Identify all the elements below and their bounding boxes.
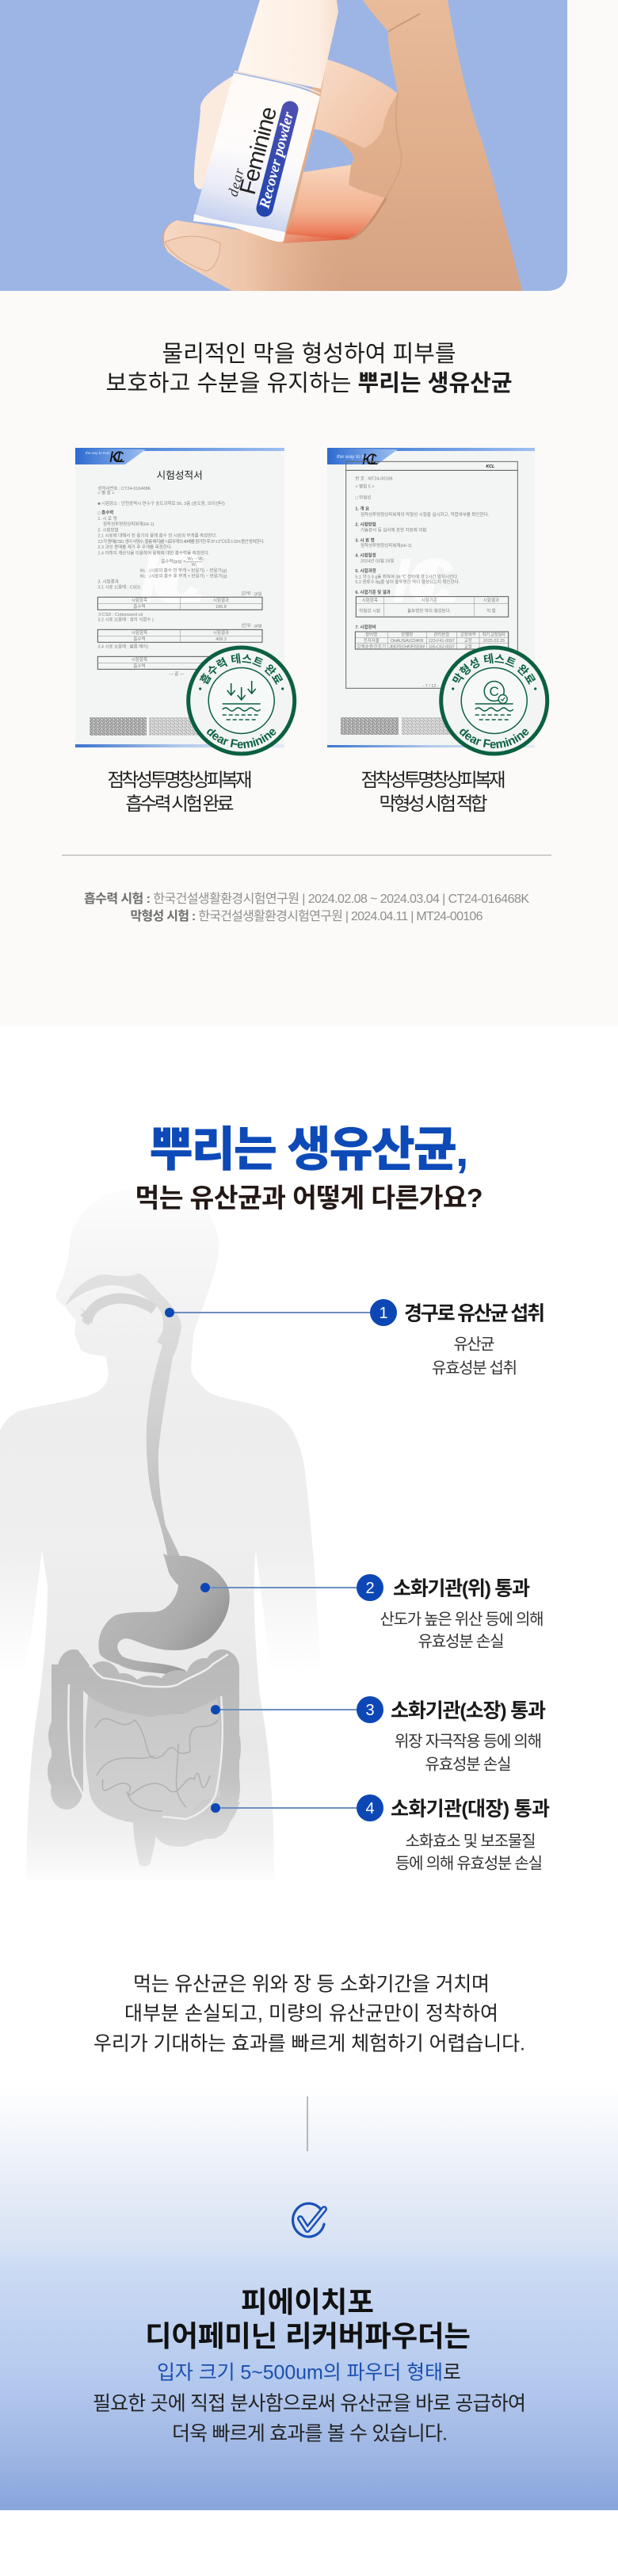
document text: 3.2 시료 2(용매 : 생리 식염수 ) [97,617,154,623]
document text: ■ 시험장소 : 인천광역시 연수구 송도과학로 56, 3층 (송도동, 브이센터) [97,500,225,506]
document text: < 별첨 5 > [355,483,374,489]
explanation text: 우리가 기대하는 효과를 빠르게 체험하기 어렵습니다. [93,2032,525,2054]
heading: physical film [106,341,512,396]
step 2: stomach passage: 소화기관(위) 통과 [393,1577,530,1599]
panel: cream background [0,0,618,1026]
panel: film forming test certificate: KCL [392,545,460,616]
step 4: large intestine passage: 소화효소 및 보조물질 [406,1833,536,1851]
document text: 5.2 증류수 8g을 넣어 불투명한 막이 형성되는지 확인한다. [355,579,460,585]
badge: film forming test complete: dear Feminine [460,729,529,748]
panel: film forming test certificate [327,448,535,748]
step 1: oral intake [165,1299,545,1378]
document text: W₂ : (시료의 흡수 후 무게 + 반응기) − 반응기(g) [140,573,227,579]
badge: film forming test complete: 막형성 테스트 완료 [452,653,536,685]
test reference notes: 흡수력 시험 : 한국건설생활환경시험연구원 | 2024.02.08 ~ 2024.03.04 | CT24-016468K [84,892,529,906]
step 1: oral intake: 유산균 [453,1336,494,1354]
step 3: small intestine passage: 유효성분 손실 [425,1756,512,1774]
document text: W₂ − W₁ [188,557,204,562]
document text: 시험성적서 [157,470,203,481]
caption: film forming test [361,770,505,814]
document text: 186.8 [216,605,227,610]
document text: W₁ : (시료의 흡수 전 무게 + 반응기) − 반응기(g) [140,567,227,573]
document text: — 끝 — [169,671,185,677]
closing heading [145,2286,471,2352]
heading: physical film: 보호하고 수분을 유지하는 뿌리는 생유산균 [106,370,512,396]
bottle brand labels: Recover powder [256,109,297,211]
panel: absorption test certificate: KCL [109,449,125,466]
badge: absorption test complete [186,645,296,756]
stomach [98,1554,230,1676]
closing text: 더욱 빠르게 효과를 볼 수 있습니다. [172,2422,448,2444]
document text: 2.2 각 용매(CSD, 생리 식염수, 볼륨 배지)를 시료무게의 40배를 첨가한 후 37 ± 2℃/1조 ± 23 h 동안 방치한다. [97,538,265,545]
bottle [193,0,338,242]
panel: film forming test certificate: KCL [362,452,379,468]
badge: film forming test complete: C [490,684,499,699]
document text: □ 흡수력 [97,510,113,516]
document text: 장비명 [365,632,377,638]
document text: 흡수력 [133,603,146,610]
document text: 시험항목 [132,629,147,636]
panel: product photo [0,0,567,291]
document text: 전자저울 [364,637,380,644]
step 3: small intestine passage: 3 [365,1702,375,1719]
document text: 교정여부 [460,632,476,638]
document text: [단위 : g/g] [242,590,262,596]
document text: 흡수력(g/g) = [161,558,185,564]
document text: 7. 시험장비 [355,624,376,630]
step 4: large intestine passage [211,1794,550,1873]
panel: absorption test certificate: KCL [139,539,206,618]
heading: physical film: 물리적인 막을 형성하여 피부를 [162,341,456,367]
document text: 적 합 [486,607,496,613]
document text: 3.4 시료 3(용매 : 볼륨 배지) [97,644,148,650]
document text: 2024년 03월 26일 [360,558,395,564]
document text: 2025.03.25 [483,639,505,644]
panel: absorption test certificate [75,448,284,748]
body diagram [0,1187,321,1880]
panel: blue gradient background [0,2077,618,2510]
panel: film forming test certificate: the way to trust [337,454,372,460]
document text: 교정 [464,638,472,644]
document text: 시험결과 [213,629,229,636]
document text: OHAUS/AX224KR [391,639,424,644]
heading: sprayed vs oral probiotics: 먹는 유산균과 어떻게 다른가요? [135,1184,483,1213]
oral cavity and esophagus [65,1273,181,1557]
document text: 점착성투명창상피복재(HI-1) [360,542,412,548]
document text: 시험항목 [132,656,147,663]
step 1: oral intake: 유효성분 섭취 [432,1359,517,1378]
icon: check mark [293,2203,324,2237]
document text: 5.1 약 0.3 g을 취하여 38 ℃ 정비에 약 2시간 방치시킨다. [355,573,459,579]
document text: ※CSD : Cottonseed oil [97,612,143,617]
step 2: stomach passage: 2 [365,1580,375,1597]
step 3: small intestine passage: 소화기관(소장) 통과 [391,1699,546,1722]
human silhouette [0,1187,321,1880]
document text: 관리번호 [433,632,449,638]
document text: 5. 시험과정 [355,568,376,574]
step 4: large intestine passage: 4 [365,1800,375,1817]
bottle brand labels [225,104,297,211]
hand holding the bottle [162,0,522,291]
document text: 2.1 시료에 대해서 전 용기의 용매 흡수 전 시료의 무게를 측정한다. [97,533,217,539]
document text: 1. 시 료 명 [97,516,117,522]
document text: 번 호 : MT24-00106 [355,475,393,481]
badge: absorption test complete: dear Feminine [207,729,276,748]
document text: 강제순환건조기 [357,643,386,649]
document text: 408.3 [216,637,227,642]
explanation text: 먹는 유산균은 위와 장 등 소화기간을 거치며 [133,1974,490,1996]
explanation text [93,1974,525,2054]
step 2: stomach passage: 유효성분 손실 [418,1633,504,1651]
document text: 2.4 아래의 계산식을 이용하여 용매에 대한 흡수력을 측정한다. [97,549,210,556]
panel: absorption test certificate: the way to trust [86,451,110,455]
step 4: large intestine passage: 소화기관(대장) 통과 [391,1798,550,1820]
document text: 교정 [464,644,472,649]
document text: 불투명한 막이 형성된다. [407,607,452,613]
document text: 3.1 시료 1(용매 : CSD) [97,584,140,590]
closing text [93,2362,526,2444]
document text: 성적서번호 : CT24-016468K [97,485,151,491]
document text: 123-F41-0097 [429,639,455,644]
step 3: small intestine passage: 위장 자극작용 등에 의해 [395,1733,542,1751]
document text: 모델명 [401,632,413,638]
bottle brand labels: Feminine [235,104,282,197]
document text: 막형성 시험 [359,607,380,613]
step 1: oral intake: 1 [379,1305,388,1322]
closing heading: 피에이치포 [241,2286,374,2318]
closing text: 필요한 곳에 직접 분사함으로써 유산균을 바로 공급하여 [93,2392,526,2414]
caption: film forming test: 점착성투명창상피복재 [361,770,505,790]
document text: JEIOTECH/OF22GW [389,644,425,649]
test reference notes: 막형성 시험 : 한국건설생활환경시험연구원 | 2024.04.11 | MT24-00106 [130,909,483,923]
document text: 3. 시험결과 [97,578,119,584]
document text: 105-C62-0037 [429,644,455,649]
caption: absorption test [108,770,252,814]
document text: KCL [486,464,494,469]
document text: 시험결과 [213,597,229,603]
test reference notes [84,892,529,923]
document text: < 별 첨 > [97,490,114,496]
large intestine [48,1649,241,1866]
explanation text: 대부분 손실되고, 미량의 유산균만이 정착하여 [124,2002,498,2024]
document text: - 7 / 12 - [422,684,439,689]
document text: W₁ [192,563,197,568]
document text: 점착성투명창상피복재의 막형성 시험을 실시하고, 적합여부를 확인한다. [360,511,490,518]
document text: [단위 : g/g] [242,622,262,629]
step 4: large intestine passage: 등에 의해 유효성분 손실 [395,1855,543,1873]
document text [97,470,265,677]
document text: 흡수력 [133,663,146,669]
document text: 2. 시험방법 [97,526,119,533]
badge: film forming test complete [439,645,550,756]
document text: 흡수력 [133,636,146,642]
document text: □ 막형성 [355,495,371,501]
document text: 시험기준 [422,597,437,603]
document text: 1. 개 요 [355,506,369,512]
caption: absorption test: 흡수력 시험 완료 [125,793,235,814]
document text: 2.3 과잉 용매를 제거 후 무게를 측정한다. [97,544,173,550]
step 2: stomach passage: 산도가 높은 위산 등에 의해 [380,1611,544,1629]
document text [346,461,517,689]
document text: 점착성투명창상피복재(HI-1) [103,521,154,527]
document text: 4. 시험일정 [355,552,376,559]
document text: 시험항목 [362,597,378,603]
small intestine [86,1688,227,1824]
badge: absorption test complete: 흡수력 테스트 완료 [200,653,284,685]
step 2: stomach passage [200,1574,544,1651]
document text: 3. 시 료 명 [355,537,375,543]
closing heading: 디어페미닌 리커버파우더는 [145,2320,471,2352]
document text: 시험항목 [132,597,147,603]
document text: 6. 시험기준 및 결과 [355,589,391,595]
heading: sprayed vs oral probiotics [135,1123,483,1213]
document text: 시험결과 [483,597,499,603]
document text: 기술문서 등 심사에 관한 자료에 의함. [360,526,428,533]
step 3: small intestine passage [211,1696,546,1774]
heading: sprayed vs oral probiotics: 뿌리는 생유산균, [149,1123,469,1176]
caption: absorption test: 점착성투명창상피복재 [108,770,252,790]
bottle brand labels: dear [225,166,247,198]
document text: 차기 교정일자 [483,632,505,638]
closing text: 입자 크기 5~500um의 파우더 형태로 [157,2362,461,2384]
caption: film forming test: 막형성 시험 적합 [379,793,488,814]
document text: 2. 시험방법 [355,522,376,528]
step 1: oral intake: 경구로 유산균 섭취 [404,1303,545,1325]
